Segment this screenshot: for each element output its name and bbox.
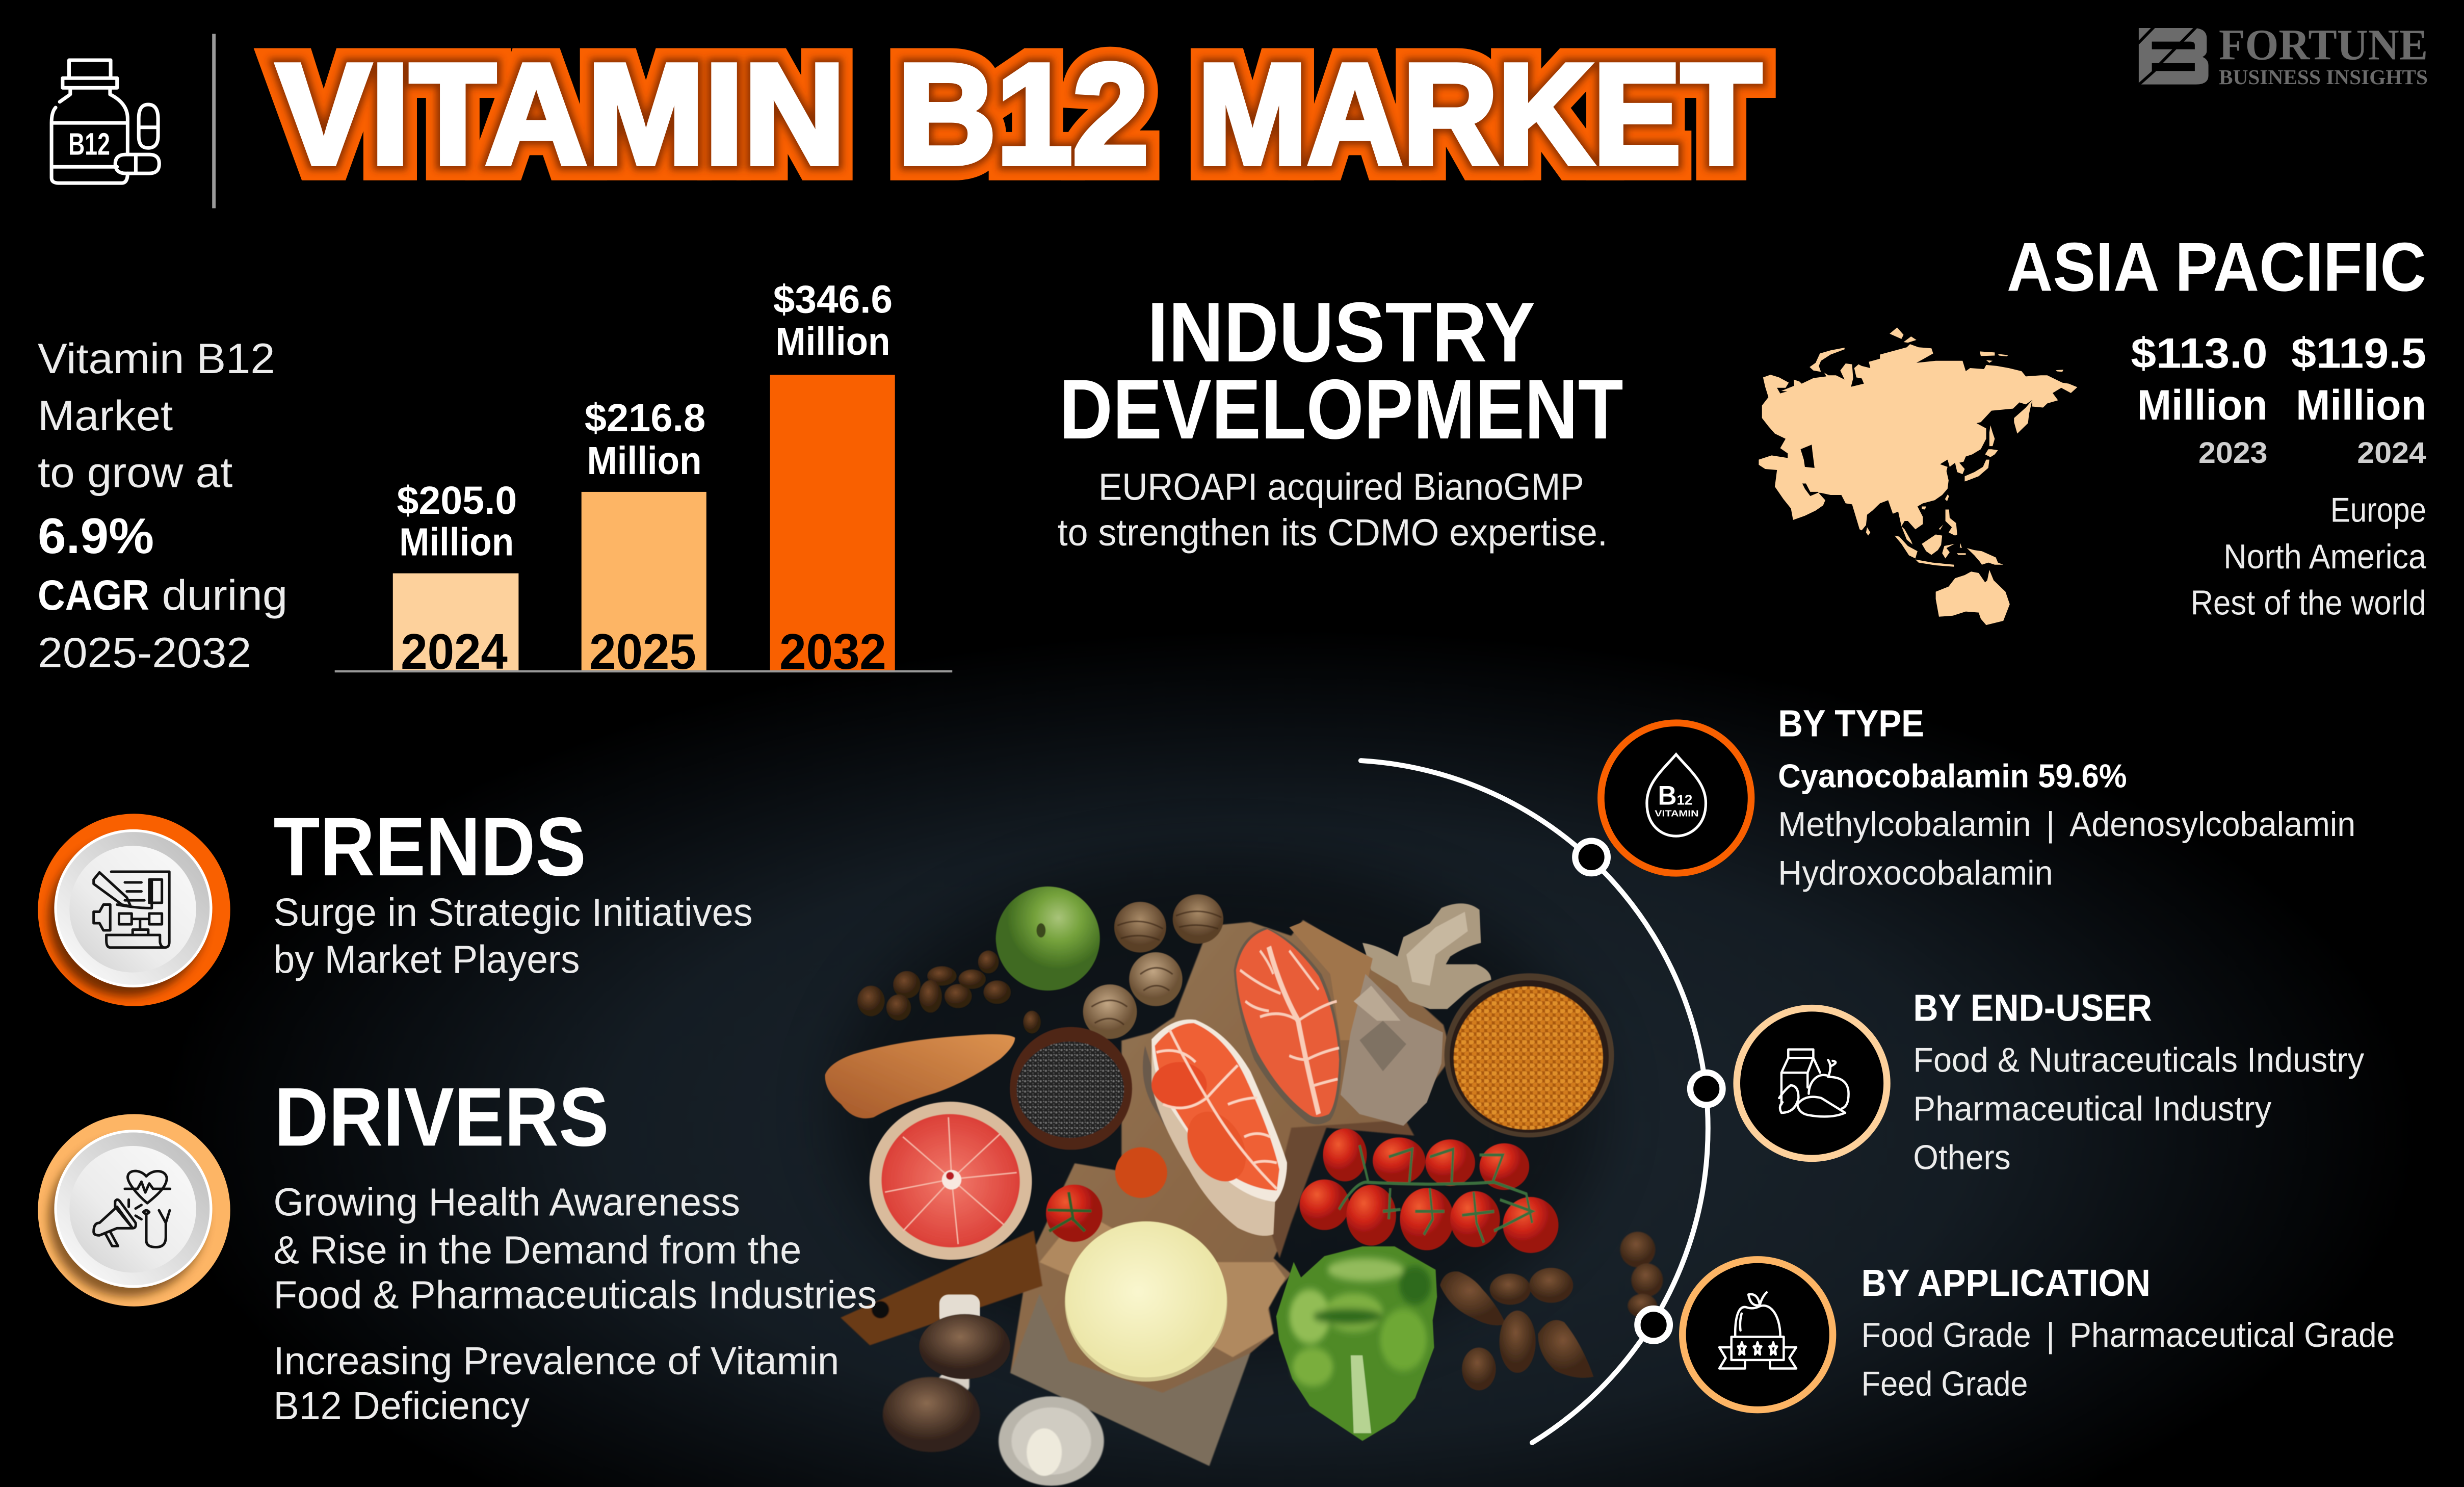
panel: drivers: DRIVERS bbox=[274, 1070, 609, 1163]
panel: industry development: DEVELOPMENT bbox=[1059, 362, 1623, 457]
panel: by application: Food Grade bbox=[1862, 1316, 2031, 1354]
panel: by type bbox=[1601, 702, 2355, 893]
panel: drivers bbox=[38, 1070, 877, 1428]
panel: by end-user: Others bbox=[1913, 1139, 2011, 1177]
list: other regions: North America bbox=[2223, 538, 2426, 576]
bar 2032: 2032 bbox=[779, 623, 886, 680]
panel: industry development: to strengthen its CDMO expertise. bbox=[1058, 511, 1608, 554]
panel: industry development: EUROAPI acquired BianoGMP bbox=[1098, 465, 1584, 508]
panel: by application: Pharmaceutical Grade bbox=[2069, 1316, 2395, 1354]
paper and board bbox=[841, 920, 1663, 1486]
title bbox=[277, 35, 1762, 194]
list: other regions: Rest of the world bbox=[2191, 584, 2426, 622]
bar 2032: $346.6 bbox=[773, 277, 893, 321]
panel: by application: BY APPLICATION bbox=[1862, 1262, 2151, 1304]
bar 2024: $205.0 bbox=[397, 479, 517, 523]
stat: 2024 value: 2024 bbox=[2357, 436, 2426, 469]
panel: drivers: Food & Pharmaceuticals Industries bbox=[273, 1273, 877, 1317]
panel: Asia Pacific: ASIA PACIFIC bbox=[2007, 228, 2426, 305]
stat: 2024 value: $119.5 bbox=[2291, 329, 2426, 377]
text block: market growth summary: CAGR bbox=[38, 571, 149, 619]
bar 2025 bbox=[582, 396, 706, 680]
map: Asia Pacific bbox=[1759, 327, 2077, 625]
title: MARKET bbox=[1197, 35, 1762, 194]
panel: Asia Pacific bbox=[1759, 228, 2426, 625]
icon: B12 supplement bottle: B12 bbox=[68, 127, 110, 162]
panel: by type: | bbox=[2046, 805, 2055, 844]
panel: by application: | bbox=[2046, 1316, 2055, 1354]
icon: B12 vitamin drop bbox=[1601, 723, 1751, 873]
icon: drivers disc bbox=[38, 1114, 230, 1307]
panel: by end-user: Food & Nutraceuticals Industry bbox=[1913, 1041, 2364, 1080]
icon: B12 vitamin drop: 12 bbox=[1676, 792, 1692, 807]
title: VITAMIN bbox=[277, 35, 846, 194]
bar 2032 bbox=[770, 277, 895, 680]
text block: market growth summary: during bbox=[162, 571, 287, 619]
panel: by end-user: Pharmaceutical Industry bbox=[1913, 1090, 2271, 1128]
text block: market growth summary bbox=[38, 335, 287, 676]
panel: trends: TRENDS bbox=[273, 800, 586, 893]
text block: market growth summary: 6.9% bbox=[38, 508, 154, 564]
panel: by type: Adenosylcobalamin bbox=[2069, 805, 2355, 844]
icon: B12 supplement bottle bbox=[51, 60, 159, 183]
panel: drivers: Increasing Prevalence of Vitamin bbox=[273, 1339, 839, 1383]
panel: drivers: B12 Deficiency bbox=[273, 1384, 530, 1428]
arc connector bbox=[1361, 761, 1722, 1443]
panel: by type: Cyanocobalamin 59.6% bbox=[1778, 758, 2127, 795]
title: B12 bbox=[897, 35, 1149, 194]
logo: Fortune Business Insights: BUSINESS INSIGHTS bbox=[2219, 66, 2428, 89]
panel: drivers: & Rise in the Demand from the bbox=[273, 1229, 801, 1272]
list: other regions: Europe bbox=[2330, 491, 2426, 530]
bar 2024: Million bbox=[399, 520, 514, 564]
bar 2025: Million bbox=[587, 439, 702, 483]
icon: trends disc bbox=[38, 814, 230, 1006]
panel: by type: BY TYPE bbox=[1778, 702, 1924, 744]
panel: by application bbox=[1683, 1260, 2395, 1410]
panel: drivers: Growing Health Awareness bbox=[273, 1181, 740, 1224]
stat: 2024 value bbox=[2291, 329, 2426, 469]
photo: vitamin B12 foods bbox=[825, 856, 1663, 1486]
bar 2024: 2024 bbox=[401, 623, 508, 680]
text block: market growth summary: Vitamin B12 bbox=[38, 335, 275, 382]
panel: trends: Surge in Strategic Initiatives bbox=[273, 891, 753, 934]
title: VITAMIN bbox=[277, 35, 846, 194]
title: VITAMIN bbox=[277, 35, 846, 194]
title: B12 bbox=[897, 35, 1149, 194]
stat: 2023 value: $113.0 bbox=[2131, 329, 2268, 377]
bar 2032: Million bbox=[775, 320, 890, 363]
list: other regions bbox=[2191, 491, 2426, 622]
title: MARKET bbox=[1197, 35, 1762, 194]
icon: apple with quality ribbon bbox=[1683, 1260, 1833, 1410]
bar chart: market size bbox=[335, 277, 952, 680]
stat: 2023 value bbox=[2131, 329, 2268, 469]
icon: food and nutrition bbox=[1737, 1008, 1887, 1158]
panel: by end-user bbox=[1737, 986, 2364, 1177]
stat: 2023 value: 2023 bbox=[2198, 436, 2268, 469]
panel: industry development: INDUSTRY bbox=[1147, 285, 1535, 380]
stat: 2024 value: Million bbox=[2296, 381, 2426, 429]
panel: trends bbox=[38, 800, 753, 1006]
icon: FB logo mark bbox=[2138, 27, 2209, 86]
panel: industry development bbox=[1058, 285, 1623, 554]
logo: Fortune Business Insights bbox=[2138, 20, 2428, 89]
text block: market growth summary: to grow at bbox=[38, 449, 232, 497]
panel: by application: Feed Grade bbox=[1862, 1365, 2028, 1403]
right foods bbox=[1234, 903, 1614, 1441]
logo: Fortune Business Insights: FORTUNE bbox=[2219, 20, 2428, 69]
text block: market growth summary: Market bbox=[38, 392, 173, 439]
text block: market growth summary: 2025-2032 bbox=[38, 629, 251, 676]
icon: B12 vitamin drop: VITAMIN bbox=[1655, 808, 1699, 819]
title: B12 bbox=[897, 35, 1149, 194]
bar 2025: 2025 bbox=[589, 623, 696, 680]
title: MARKET bbox=[1197, 35, 1762, 194]
panel: by type: Methylcobalamin bbox=[1778, 805, 2031, 844]
panel: by type: Hydroxocobalamin bbox=[1778, 854, 2053, 893]
bar 2024 bbox=[393, 479, 518, 680]
panel: trends: by Market Players bbox=[273, 937, 580, 981]
icon: B12 vitamin drop: B bbox=[1658, 781, 1676, 811]
bar 2025: $216.8 bbox=[585, 396, 705, 440]
panel: by end-user: BY END-USER bbox=[1913, 986, 2152, 1029]
stat: 2023 value: Million bbox=[2137, 381, 2268, 429]
left foods bbox=[825, 886, 1287, 1381]
